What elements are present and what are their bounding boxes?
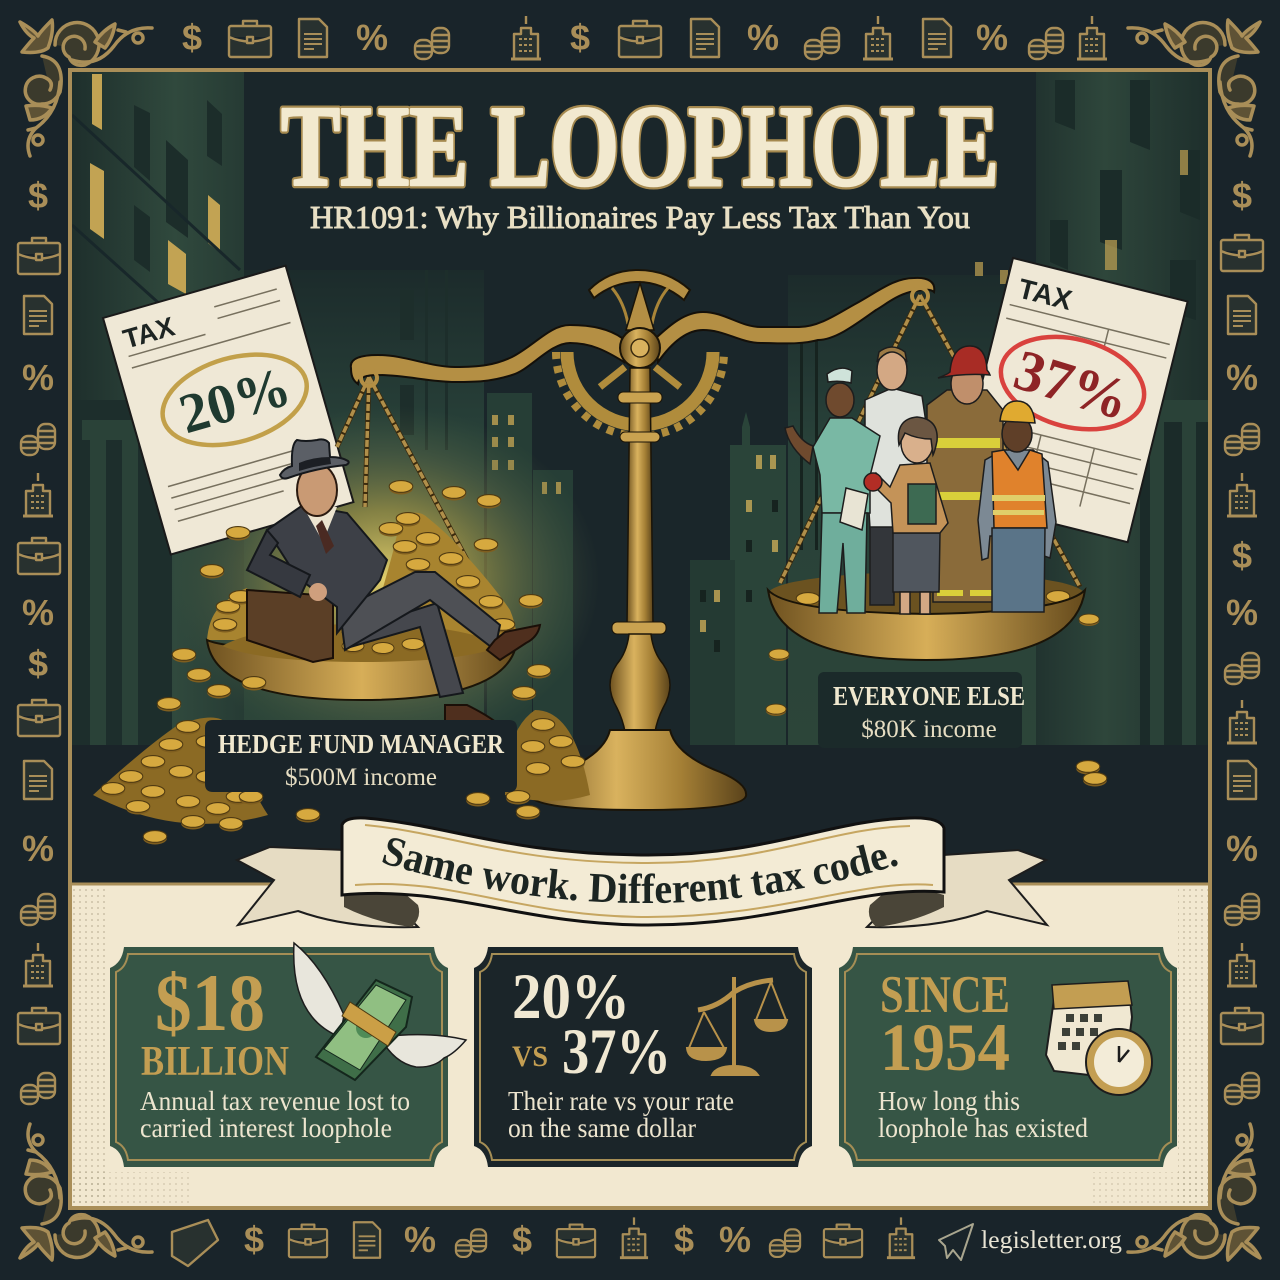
label: everyone else: EVERYONE ELSE — [833, 681, 1025, 711]
stat card: 20% vs 37%: 20% — [512, 961, 630, 1033]
ribbon banner: Same work. Different tax code. — [382, 838, 898, 904]
corner ornament: top right — [1128, 20, 1260, 156]
bottom border icons — [172, 1217, 915, 1266]
left border icons — [18, 175, 60, 1104]
left coin piles — [93, 614, 1107, 844]
street floor — [72, 745, 1208, 900]
title: THE LOOPHOLE — [281, 83, 999, 211]
stat card: 20% vs 37%: on the same dollar — [508, 1113, 696, 1143]
top border icons: % — [356, 17, 388, 58]
base — [530, 730, 746, 810]
torso — [267, 505, 387, 633]
label: hedge fund manager: HEDGE FUND MANAGER — [218, 729, 504, 759]
lower leg — [343, 603, 463, 697]
briefcase — [247, 590, 333, 662]
subtitle: HR1091: Why Billionaires Pay Less Tax Than You — [310, 199, 970, 235]
footer: paper plane and site — [939, 1224, 1123, 1260]
left pan with coins — [157, 481, 551, 711]
balance scale — [337, 270, 1080, 810]
bottom border icons: % — [719, 1219, 751, 1260]
nurse — [813, 418, 880, 513]
gear — [556, 352, 724, 436]
stat card: $18 billion: Annual tax revenue lost to — [140, 1086, 410, 1116]
head — [297, 464, 337, 516]
stat card: since 1954: 1954 — [880, 1009, 1010, 1085]
label: hedge fund manager — [205, 720, 517, 792]
stat card: $18 billion: carried interest loophole — [140, 1113, 392, 1143]
hedge fund manager — [247, 439, 540, 728]
distant skyline left — [244, 270, 573, 745]
finial — [626, 283, 654, 330]
right pan — [768, 572, 1085, 660]
teacher — [893, 533, 940, 592]
doctor — [865, 388, 928, 528]
bottom cream band — [70, 884, 1210, 1210]
stat card: 20% vs 37%: 37% — [562, 1016, 671, 1088]
icon: calendar and clock — [1046, 981, 1152, 1095]
glow behind manager — [170, 405, 600, 755]
chains right — [780, 295, 1080, 587]
panel border — [70, 70, 1210, 1208]
stat card: $18 billion: BILLION — [141, 1039, 289, 1085]
title: THE LOOPHOLE — [281, 83, 999, 211]
top border icons: $ — [182, 17, 202, 58]
top border icons: % — [976, 17, 1008, 58]
right border icons: % — [1226, 357, 1258, 398]
top border icons: $ — [570, 17, 590, 58]
label: everyone else — [818, 672, 1025, 748]
right border icons: $ — [1232, 535, 1252, 576]
column — [627, 368, 653, 625]
corner ornament: bottom right — [1128, 1124, 1260, 1260]
crown arc — [589, 270, 690, 300]
tax form: 37%: 37% — [1007, 337, 1137, 433]
tax form: 20%: 20% — [173, 356, 297, 446]
corner ornament: bottom left — [20, 1124, 152, 1260]
bottom border icons: $ — [674, 1219, 694, 1260]
bottom border icons: % — [404, 1219, 436, 1260]
ribbon banner — [235, 816, 1050, 928]
stat card: $18 billion — [110, 943, 466, 1167]
arm — [247, 530, 310, 597]
right border icons — [1221, 175, 1263, 1104]
stat card: 20% vs 37% — [474, 947, 812, 1167]
icon: flying cash — [294, 943, 466, 1080]
footer: paper plane and site: legisletter.org — [981, 1227, 1123, 1254]
hat — [280, 439, 349, 479]
stat card: 20% vs 37%: VS — [512, 1040, 548, 1073]
distant skyline right — [690, 275, 1048, 745]
firefighter — [927, 390, 1003, 602]
stat card: since 1954: loophole has existed — [878, 1113, 1088, 1143]
tax form: 37%: TAX — [1015, 273, 1075, 316]
tax form: 20% — [103, 266, 353, 554]
left border icons: % — [22, 828, 54, 869]
upper leg — [340, 572, 500, 650]
left border icons: $ — [28, 175, 48, 216]
beam — [351, 278, 934, 384]
tax form: 20%: TAX — [120, 311, 178, 355]
stat card: 20% vs 37%: Their rate vs your rate — [508, 1086, 734, 1116]
icon: broken scale — [687, 977, 787, 1075]
corner ornament: top left — [20, 20, 152, 156]
left border icons: % — [22, 357, 54, 398]
top border icons: % — [747, 17, 779, 58]
shoes — [487, 625, 540, 660]
workers group — [785, 346, 1056, 614]
bottom border icons: $ — [512, 1219, 532, 1260]
label: hedge fund manager: $500M income — [285, 764, 437, 791]
right border icons: % — [1226, 828, 1258, 869]
bottom border icons: $ — [244, 1219, 264, 1260]
left border icons: % — [22, 592, 54, 633]
main panel: scene — [70, 70, 1210, 900]
stat card: since 1954 — [839, 947, 1177, 1167]
top border icons — [182, 16, 1107, 59]
chains left — [337, 377, 503, 627]
label: everyone else: $80K income — [861, 716, 997, 743]
left buildings — [72, 72, 244, 762]
stat card: since 1954: How long this — [878, 1086, 1020, 1116]
right border icons: $ — [1232, 175, 1252, 216]
stat card: $18 billion: $18 — [155, 957, 265, 1048]
right border icons: % — [1226, 592, 1258, 633]
left border icons: $ — [28, 643, 48, 684]
tax form: 37% — [953, 258, 1188, 542]
stat card: since 1954: SINCE — [880, 966, 1010, 1024]
worker — [978, 450, 1056, 560]
right buildings — [975, 72, 1208, 762]
